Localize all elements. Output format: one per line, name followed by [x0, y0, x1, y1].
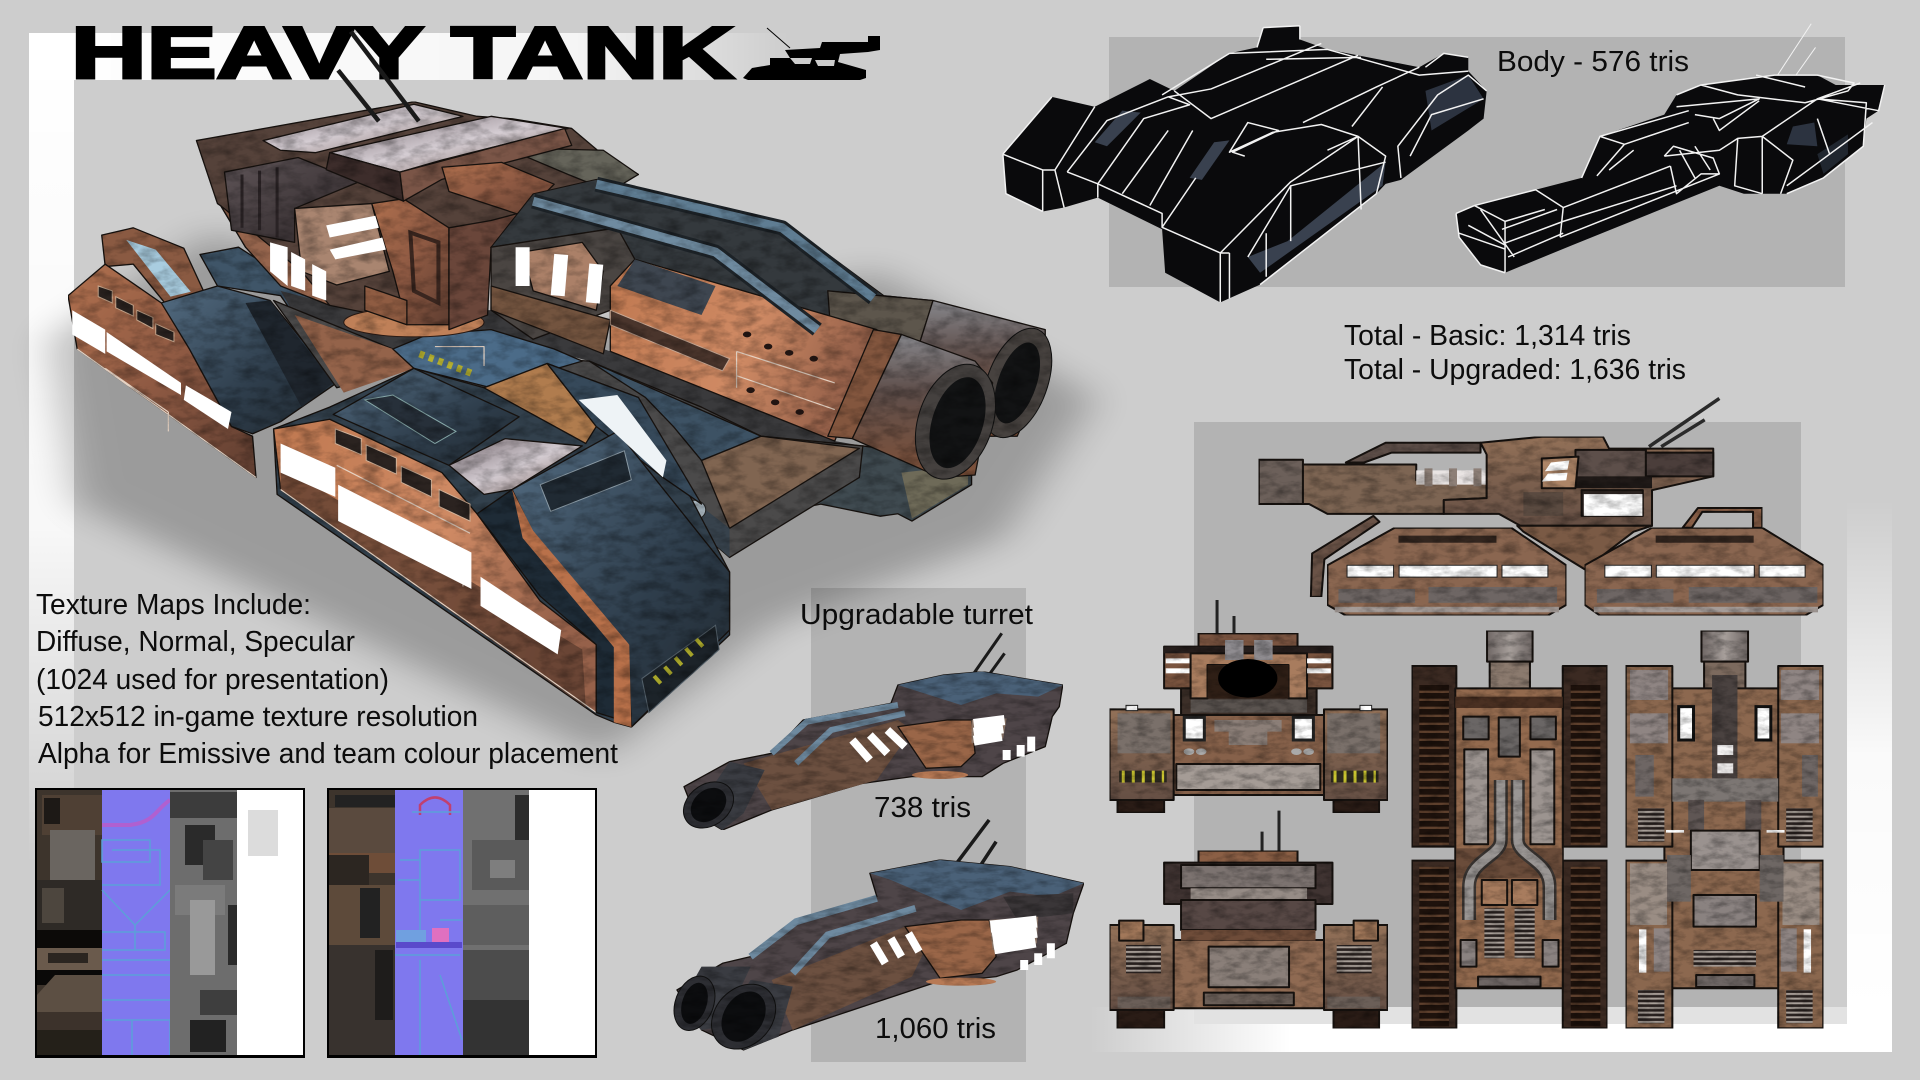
front view [1110, 600, 1388, 813]
normal map [102, 790, 170, 1055]
wireframe: body [1003, 26, 1487, 302]
turret side [1259, 437, 1762, 597]
main tank render [49, 32, 1094, 756]
antennas [338, 32, 419, 121]
icon: tank silhouette [743, 28, 880, 80]
label: 738 tris: 738 tris [874, 792, 971, 824]
label: total tris: Total - Basic: 1,314 tris [1344, 320, 1631, 352]
lower hull behind barrel [281, 291, 863, 446]
top view [1626, 631, 1823, 1028]
orthographic views [1110, 600, 1823, 1028]
textured hull [68, 102, 1064, 727]
label: body tris: Body - 576 tris [1497, 46, 1689, 78]
panel: wireframe backdrop [1109, 37, 1845, 287]
back-left pod [68, 228, 344, 477]
drop shadow [49, 233, 1094, 756]
small turret: 738 tris [676, 633, 1063, 830]
panel: ortho backdrop lower band [1194, 1007, 1847, 1024]
label: total tris: Total - Upgraded: 1,636 tris [1344, 354, 1686, 386]
antennas [1649, 398, 1719, 447]
diffuse map [37, 790, 102, 1055]
white frame: top left [29, 33, 789, 863]
barrel rails [533, 184, 873, 330]
small turret: 1,060 tris [669, 820, 1084, 1051]
front barrel [610, 259, 1007, 484]
panel: turret backdrop [811, 588, 1026, 1062]
centre deck [274, 301, 863, 557]
title: HEAVY TANK [71, 13, 734, 94]
rear view [1110, 811, 1388, 1028]
text block: texture maps: Diffuse, Normal, Specular [36, 626, 355, 658]
texture card: second map set [327, 788, 597, 1058]
panel: orthographic views backdrop [1194, 422, 1801, 1007]
underside view [1412, 631, 1607, 1028]
text block: texture maps: 512x512 in-game texture resolution [38, 701, 478, 733]
texture card: first map set [35, 788, 305, 1058]
emissive panels [72, 216, 666, 654]
diffuse map [329, 790, 395, 1055]
specular map [463, 790, 529, 1055]
label: total tris [1344, 320, 1686, 386]
gun core [491, 228, 635, 354]
text block: texture maps: Texture Maps Include: [36, 589, 311, 621]
side view [1259, 398, 1823, 615]
rear barrel [828, 291, 1064, 442]
white frame: bottom right [1090, 500, 1892, 1052]
normal map [395, 790, 463, 1055]
under-rail machinery [491, 179, 933, 330]
tracks pod left [1327, 528, 1566, 615]
front pod [274, 364, 730, 727]
turret [196, 102, 638, 337]
text block: texture maps: Alpha for Emissive and team colour placement [38, 738, 618, 770]
text block: texture maps [36, 589, 618, 770]
wireframe: turret [1456, 24, 1885, 273]
label: 1,060 tris: 1,060 tris [875, 1013, 996, 1045]
text block: texture maps: (1024 used for presentation) [36, 664, 389, 696]
tracks pod right [1585, 528, 1823, 615]
rear hull [772, 446, 972, 521]
label: upgradable turret: Upgradable turret [800, 599, 1033, 631]
specular map [170, 790, 237, 1055]
